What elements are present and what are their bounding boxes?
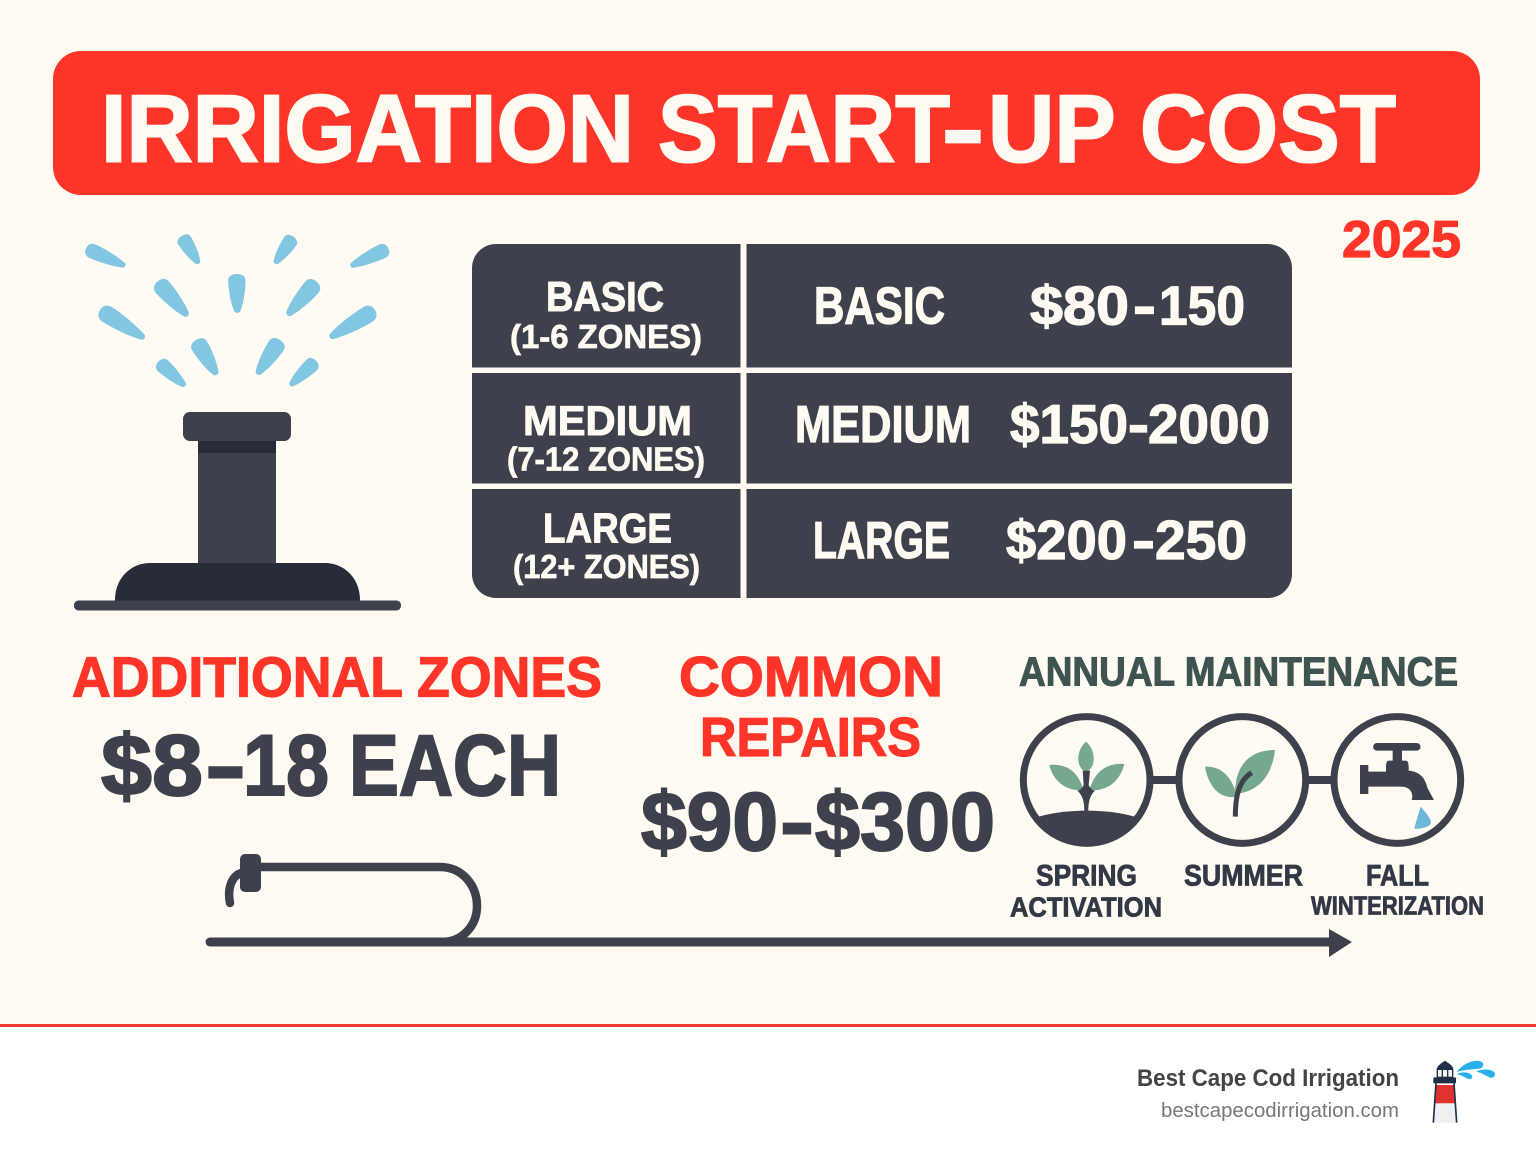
label: summer: SUMMER: [1184, 860, 1303, 892]
icon: fall faucet: [1334, 717, 1461, 843]
row: basic: [510, 273, 1245, 355]
row: medium: 2000: [1148, 393, 1270, 455]
label: spring activation: SPRING: [1036, 860, 1137, 892]
sprinkler cap: [183, 412, 291, 441]
common repairs block: [641, 645, 995, 868]
additional zones price: EACH: [349, 718, 561, 814]
title: START: [658, 76, 950, 182]
row: basic: BASIC: [546, 273, 664, 320]
row: medium: $150: [1010, 393, 1128, 455]
annual maintenance block: [1010, 648, 1484, 922]
annual maintenance heading: ANNUAL MAINTENANCE: [1019, 648, 1458, 694]
title: IRRIGATION: [101, 76, 634, 182]
water drops: [83, 232, 392, 391]
row: large: 250: [1155, 509, 1247, 571]
row: medium: [507, 393, 1270, 478]
brand name: Best Cape Cod Irrigation: [1137, 1065, 1399, 1092]
row: basic: $80: [1030, 274, 1129, 336]
title: -: [942, 76, 984, 182]
common repairs price: $300: [815, 775, 995, 868]
row: basic: -: [1133, 274, 1156, 336]
additional zones price: $8: [101, 718, 203, 814]
row: large: $200: [1006, 509, 1127, 571]
common repairs heading: COMMON: [679, 645, 943, 709]
label: fall winterization: FALL: [1366, 860, 1429, 892]
sprinkler stem: [198, 441, 276, 564]
row: large: [513, 504, 1247, 585]
icon: lighthouse logo: [1433, 1061, 1495, 1123]
row: basic: (1-6 ZONES): [510, 318, 702, 355]
sprinkler base: [115, 563, 360, 601]
row: medium: -: [1128, 393, 1149, 455]
title: COST: [1140, 76, 1396, 182]
common repairs block: REPAIRS: [700, 706, 921, 768]
title banner: [53, 51, 1480, 195]
row: large: -: [1132, 509, 1155, 571]
arrow: [210, 929, 1352, 957]
row: medium: (7-12 ZONES): [507, 440, 705, 478]
footer band: [0, 1024, 1536, 1154]
year label: 2025: [1342, 211, 1461, 269]
row: basic: 150: [1159, 274, 1245, 336]
ground line: [74, 600, 401, 610]
additional zones heading: ADDITIONAL ZONES: [72, 646, 602, 710]
label: spring activation: [1010, 860, 1162, 922]
row: large: LARGE: [813, 512, 950, 570]
common repairs price: -: [780, 775, 814, 868]
connector lines: [1150, 776, 1335, 784]
additional zones price: -: [205, 718, 246, 814]
common repairs price: $90: [641, 775, 778, 868]
icon: summer plant: [1179, 717, 1306, 843]
additional zones price: 18: [243, 718, 329, 814]
row: medium: MEDIUM: [795, 396, 971, 454]
row: basic: BASIC: [814, 278, 945, 336]
brand url: bestcapecodirrigation.com: [1161, 1100, 1399, 1122]
icon: hose and arrow: [210, 854, 1352, 957]
pricing table: [472, 244, 1292, 598]
label: spring activation: ACTIVATION: [1010, 892, 1162, 922]
additional zones block: [72, 646, 602, 814]
icon: sprinkler with water spray: [74, 232, 401, 610]
row: large: LARGE: [543, 504, 672, 552]
row: large: (12+ ZONES): [513, 548, 700, 585]
title: UP: [988, 76, 1114, 182]
label: fall winterization: WINTERIZATION: [1311, 890, 1484, 920]
icon: spring sprout: [1023, 717, 1150, 843]
row: medium: MEDIUM: [523, 397, 692, 444]
label: fall winterization: [1311, 860, 1484, 920]
